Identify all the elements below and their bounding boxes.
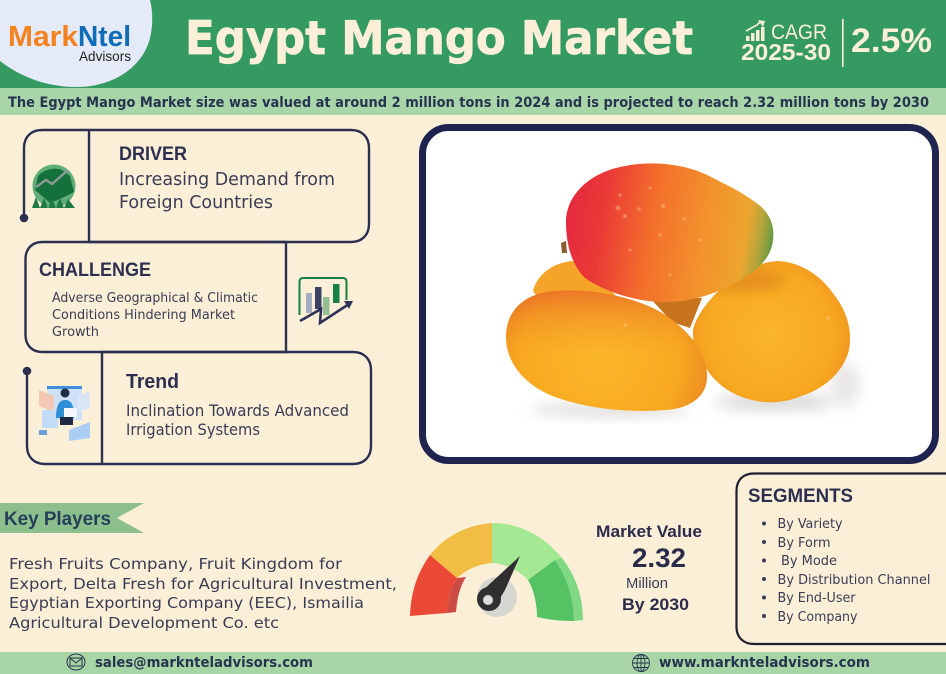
panel: challenge: Adverse Geographical & Climatic [52,290,258,306]
panel: challenge: Growth [52,324,99,340]
panel: mango photo [422,128,936,460]
segment list: By Form [778,535,830,551]
panel: driver: Increasing Demand from [119,169,335,190]
panel: driver: DRIVER [119,144,187,165]
summary strip [0,88,946,115]
panel: challenge [26,242,353,352]
key players list: Export, Delta Fresh for Agricultural Investment, [9,575,397,593]
icon: email [67,654,85,670]
panel: driver [20,130,369,242]
segment list [762,516,930,625]
red segment [410,555,466,616]
footer [0,652,946,674]
panel: trend: Inclination Towards Advanced [126,401,349,420]
footer: sales@markntel​advisors.com [95,655,313,671]
header band [0,0,946,88]
icon: bar chart with arrow [300,278,353,323]
panel: trend [23,352,371,464]
segment list: By End-User [778,590,856,606]
icon: growth chart [746,20,765,41]
dark green segment [528,558,583,621]
CAGR block: 2.5% [851,22,932,60]
market value [596,522,702,614]
footer: www.markntel​advisors.com [659,655,870,671]
panel: challenge: CHALLENGE [39,259,151,281]
gauge [410,523,583,621]
market value: Million [626,576,668,592]
needle and hub [477,556,520,617]
market value: By 2030 [622,596,689,614]
market value: 2.32 [632,543,686,573]
key players list [9,555,397,632]
yellow segment [430,523,492,578]
segment list: By Company [778,609,858,625]
title: Egypt Mango Market [185,11,693,65]
logo: Ntel [78,21,131,53]
key players list: Egyptian Exporting Company (EEC), Ismailia [9,594,364,612]
panel: trend: Trend [126,371,179,393]
market value: Market Value [596,522,702,541]
icon: analyst with dashboards [39,386,90,441]
panel: segments: SEGMENTS [748,485,853,507]
panel: driver: Foreign Countries [119,192,273,213]
key players list: Agricultural Development Co. etc [9,614,279,632]
icon: globe with farmers [32,164,76,208]
key players ribbon [0,503,144,533]
segment list: By Distribution Channel [778,572,930,588]
panel: segments [736,474,946,644]
panel: trend: Irrigation Systems [126,420,260,439]
segment list: By Mode [781,553,837,569]
key players ribbon: Key Players [4,508,111,530]
CAGR block: CAGR [771,21,827,44]
key players list: Fresh Fruits Company, Fruit Kingdom for [9,555,343,573]
illustration: mangoes [506,163,859,416]
CAGR block [741,19,932,67]
panel: challenge: Conditions Hindering Market [52,307,235,323]
logo [0,0,152,87]
icon: globe [632,654,650,672]
segment list: By Variety [778,516,842,532]
light green segment [492,523,562,580]
CAGR block: 2025-30 [741,39,831,65]
logo: Advisors [79,48,131,64]
logo: Mark [8,21,79,53]
